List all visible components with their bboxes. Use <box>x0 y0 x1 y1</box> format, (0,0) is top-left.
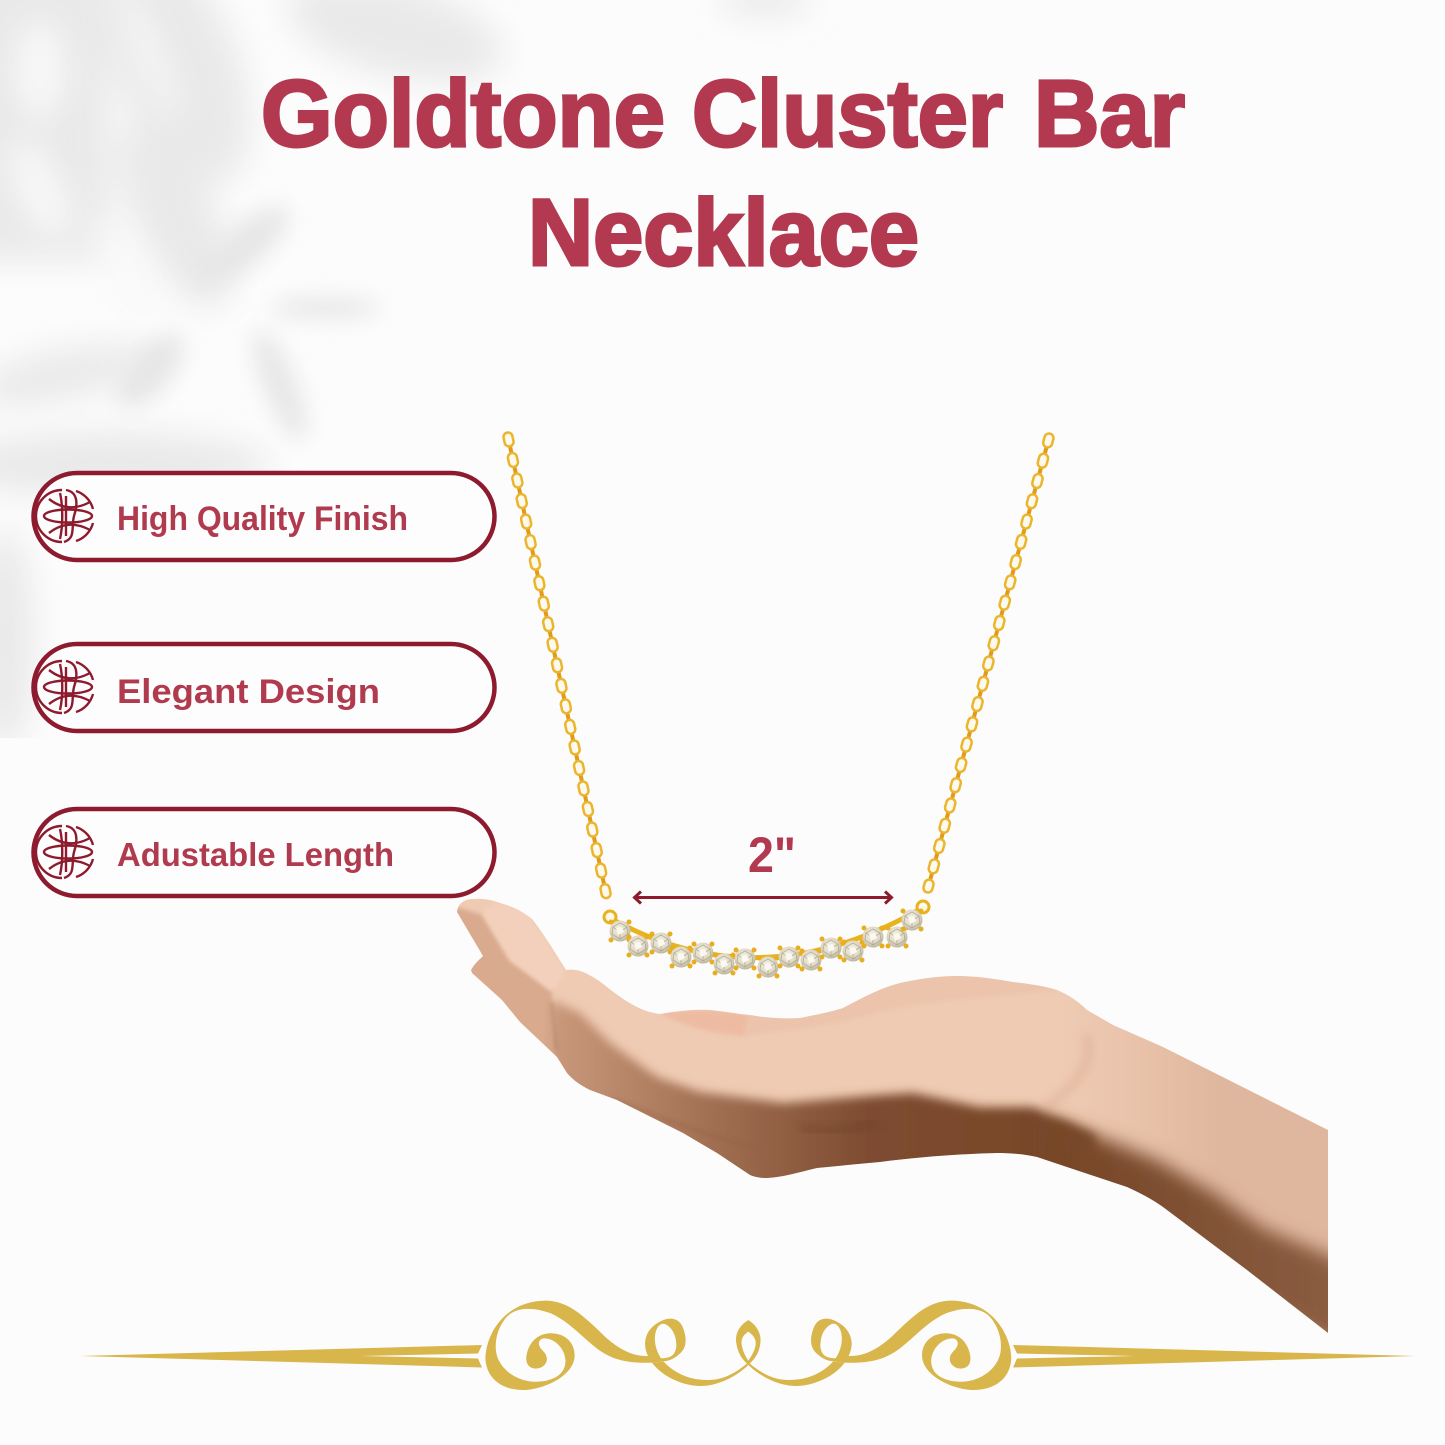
icon: globe emblem <box>36 826 93 878</box>
necklace chain: left <box>508 437 607 898</box>
shadow fold <box>806 1128 816 1133</box>
divider bar: left <box>80 1345 482 1368</box>
ornamental divider <box>80 1301 1415 1390</box>
feature pill: Elegant Design <box>34 644 494 731</box>
finger crease <box>550 1002 628 1104</box>
title: Goldtone <box>261 61 665 167</box>
wrist knob shading <box>1045 1035 1089 1108</box>
underside shadow: forearm <box>1050 1118 1345 1350</box>
title: Necklace <box>528 180 919 286</box>
index finger <box>482 912 554 992</box>
necklace cluster bar <box>604 901 929 978</box>
feature pill: High Quality Finish <box>34 473 494 560</box>
title: Bar <box>1034 61 1185 167</box>
palm hollow <box>660 1010 750 1036</box>
title <box>261 61 1185 286</box>
underside shadow: palm <box>550 1000 1095 1200</box>
label: Adustable Length <box>117 836 394 873</box>
forearm tone <box>1125 1031 1328 1258</box>
dimension arrow <box>634 892 892 904</box>
hand holding necklace <box>457 898 1328 1333</box>
label: High Quality Finish <box>117 500 408 538</box>
background leaf shadow <box>0 0 810 750</box>
upper palm fold tone <box>745 970 1060 1036</box>
title: Cluster <box>692 61 1003 167</box>
label: Elegant Design <box>117 673 380 711</box>
dimension label: 2" <box>748 827 796 883</box>
back fingers <box>457 906 554 1052</box>
divider bar: right <box>1013 1345 1415 1368</box>
divider scrollwork <box>485 1301 1011 1390</box>
necklace chain: right <box>928 438 1049 888</box>
icon: globe emblem <box>36 490 93 542</box>
icon: globe emblem <box>36 661 93 713</box>
feature pill: Adustable Length <box>34 809 494 896</box>
